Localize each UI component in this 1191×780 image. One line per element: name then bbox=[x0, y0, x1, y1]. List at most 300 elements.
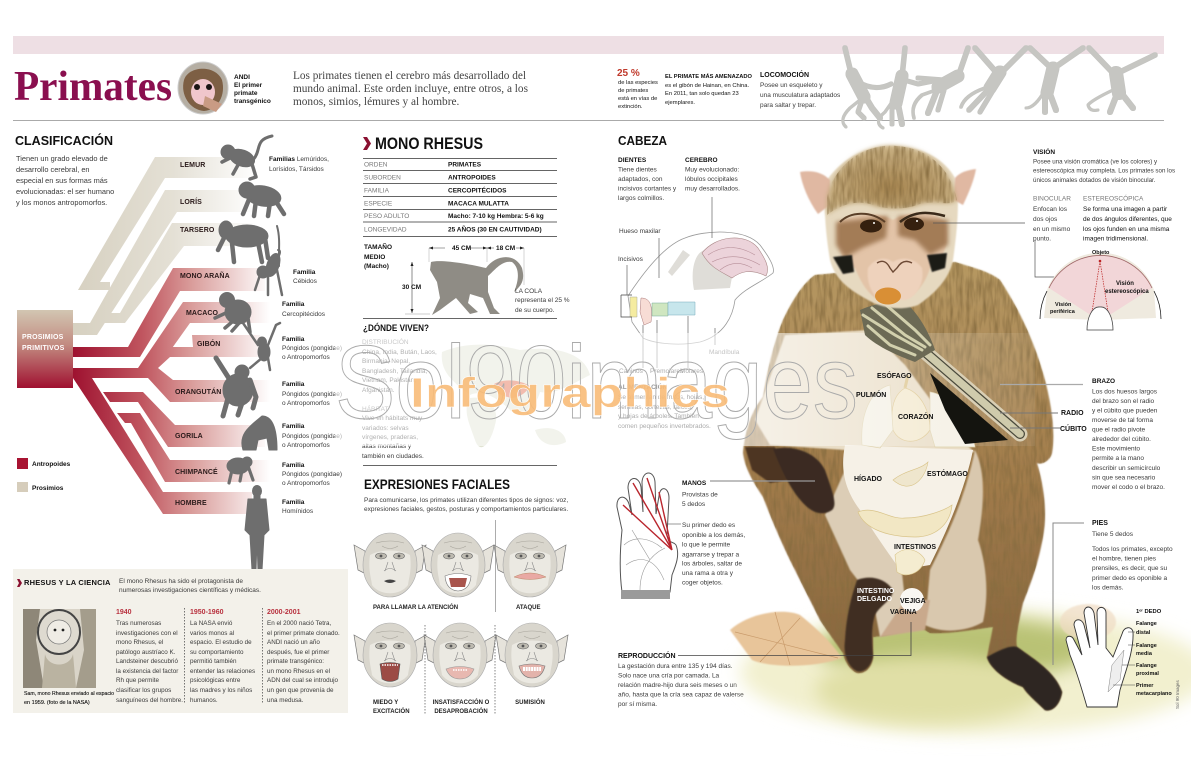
column 1950-1960: las madres y los niños bbox=[190, 687, 252, 694]
distribution and habitat text: Birmania, Nepal, bbox=[362, 358, 410, 365]
classification text: y los monos antropomorfos. bbox=[16, 198, 107, 207]
stereoscopic text: de dos ángulos diferentes, que bbox=[1083, 216, 1172, 223]
stat: 25 %: 25 % bbox=[617, 68, 640, 79]
organ labels: ESTÓMAGO bbox=[927, 469, 968, 478]
column 2000-2001: un gen que provenía de bbox=[267, 687, 334, 694]
feeding text: semillas, cortezas, raíces, bbox=[618, 404, 693, 411]
photo caption bbox=[234, 74, 271, 105]
legend: Antropoides bbox=[32, 461, 71, 468]
skull diagram bbox=[621, 197, 773, 368]
reproduction text: REPRODUCCIÓN bbox=[618, 651, 676, 660]
reproduction text: por sí misma. bbox=[618, 701, 657, 708]
column 2000-2001: ANDI nació un año bbox=[267, 639, 320, 646]
teeth text bbox=[618, 157, 677, 202]
column 2000-2001: ADN del cual se introdujo bbox=[267, 677, 339, 684]
teeth text: incisivos cortantes y bbox=[618, 186, 677, 192]
vision field diagram: estereoscópica bbox=[1105, 289, 1149, 295]
foot labels bbox=[1113, 609, 1172, 697]
hand bones bbox=[860, 301, 935, 362]
organ labels: INTESTINOS bbox=[894, 544, 936, 551]
expressions intro: expresiones faciales, gestos, posturas y comportamientos particulares. bbox=[364, 506, 568, 513]
monkey body bbox=[743, 262, 1062, 710]
skull labels: Mandíbula bbox=[709, 349, 740, 356]
family labels: o Antropomorfos bbox=[282, 442, 330, 449]
cheek patches bbox=[833, 253, 947, 274]
arm text: permite a la mano bbox=[1092, 455, 1144, 462]
left hand and wrist bbox=[745, 447, 834, 513]
hands text: coger objetos. bbox=[682, 580, 723, 586]
classification tree bbox=[17, 156, 342, 515]
cap texture bbox=[827, 146, 957, 215]
brain text: lóbulos occipitales bbox=[685, 176, 739, 183]
average size diagram bbox=[364, 242, 570, 315]
inner thighs bbox=[825, 450, 986, 637]
vision text: únicos animales dotados de visión binocular. bbox=[1033, 177, 1156, 184]
foot labels: distal bbox=[1136, 630, 1151, 636]
arm text bbox=[1092, 378, 1165, 491]
organ labels bbox=[854, 371, 968, 616]
column 1940: Landsteiner descubrió bbox=[116, 658, 178, 665]
heading: expresiones faciales: EXPRESIONES FACIALES bbox=[364, 476, 510, 492]
data table: ESPECIE bbox=[364, 200, 393, 208]
silhouette: tarsier group bbox=[218, 221, 279, 266]
feet text: prensiles, es decir, que su bbox=[1092, 565, 1168, 572]
column 2000-2001: primate transgénico: bbox=[267, 658, 324, 665]
reproduction text: Solo nace una cría por camada. La bbox=[618, 672, 720, 680]
stat: most endangered primate: EL PRIMATE MÁS AMENAZADO bbox=[665, 73, 752, 80]
family labels: Lorísidos, Társidos bbox=[269, 166, 325, 173]
eyes bbox=[840, 213, 945, 232]
organ labels: CORAZÓN bbox=[898, 412, 933, 421]
column 2000-2001: En el 2000 nació Tetra, bbox=[267, 620, 332, 627]
silhouette: lemur bbox=[221, 136, 272, 179]
column 1940: 1940 bbox=[116, 609, 132, 616]
watermark orange: Infographics bbox=[410, 369, 730, 416]
locomotion text bbox=[760, 70, 841, 109]
hands text bbox=[682, 480, 745, 586]
feet text bbox=[1092, 520, 1173, 592]
skull labels: Hueso maxilar bbox=[619, 228, 661, 235]
average size diagram: LA COLA bbox=[515, 288, 543, 295]
stat: most endangered primate: En 2011, tan solo quedan 23 bbox=[665, 91, 739, 97]
watermark outline: Sol90images bbox=[335, 325, 858, 441]
family labels: Homínidos bbox=[282, 508, 314, 515]
average size diagram: MEDIO bbox=[364, 254, 385, 261]
belly with organs bbox=[843, 375, 975, 612]
photo caption: primate bbox=[234, 90, 258, 97]
data table: PRIMATES bbox=[448, 162, 482, 168]
data table: ORDEN bbox=[364, 162, 388, 168]
classification text: Tienen un grado elevado de bbox=[16, 154, 108, 163]
teeth text: DIENTES bbox=[618, 157, 647, 164]
distribution and habitat text: Afganistán. bbox=[362, 387, 395, 394]
foot diagram bbox=[1060, 604, 1133, 707]
feeding text bbox=[618, 382, 711, 430]
organ labels: VAGINA bbox=[890, 609, 917, 616]
title: Primates bbox=[14, 64, 172, 110]
reproduction text: año, hasta que la cría sea capaz de valerse bbox=[618, 692, 744, 698]
family labels: Cercopitécidos bbox=[282, 311, 326, 318]
binocular text: en un mismo bbox=[1033, 226, 1071, 233]
stereoscopic text bbox=[1083, 194, 1172, 242]
panel intro: numerosas investigaciones científicas y médicas. bbox=[119, 587, 261, 594]
brain text: CEREBRO bbox=[685, 157, 718, 164]
family labels: Familia bbox=[282, 423, 305, 430]
top pink band bbox=[13, 36, 1164, 54]
hands text: oponible a los demás, bbox=[682, 532, 745, 539]
arm text: y el cúbito que pueden bbox=[1092, 408, 1158, 414]
face labels: PARA LLAMAR LA ATENCIÓN bbox=[373, 603, 458, 611]
expressions intro bbox=[364, 497, 568, 513]
branch labels bbox=[175, 162, 230, 507]
column 1950-1960: entender las relaciones bbox=[190, 668, 255, 675]
organ labels: PULMÓN bbox=[856, 390, 886, 399]
vision field diagram: Visión bbox=[1116, 281, 1134, 287]
teeth text: adaptados, con bbox=[618, 176, 663, 183]
column 1950-1960: La NASA envió bbox=[190, 620, 233, 627]
photo caption: transgénico bbox=[234, 98, 271, 105]
foot labels: metacarpiano bbox=[1136, 691, 1172, 697]
distribution and habitat text: Bangladesh, Tailandia, bbox=[362, 368, 427, 375]
feet text: Tiene 5 dedos bbox=[1092, 531, 1134, 538]
hands text: MANOS bbox=[682, 480, 707, 487]
panel heading: RHESUS Y LA CIENCIA bbox=[24, 578, 111, 587]
data table bbox=[363, 158, 557, 236]
radius and ulna labels: CÚBITO bbox=[1060, 424, 1087, 433]
heading: clasificación: CLASIFICACIÓN bbox=[15, 133, 113, 148]
distribution and habitat text: también en ciudades. bbox=[362, 453, 424, 460]
fruit bbox=[875, 288, 901, 304]
reproduction text: La gestación dura entre 135 y 194 días. bbox=[618, 663, 733, 670]
stat: 25 %: está en vías de bbox=[618, 96, 657, 102]
face labels: EXCITACIÓN bbox=[373, 707, 410, 715]
face: call attention 2 bbox=[422, 533, 494, 597]
gibbon locomotion sequence bbox=[843, 48, 1155, 128]
column 1950-1960: humanos. bbox=[190, 697, 218, 704]
face labels bbox=[373, 603, 545, 715]
panel intro: El mono Rhesus ha sido el protagonista de bbox=[119, 578, 243, 585]
pointer lines bbox=[678, 223, 1093, 665]
feet text: el hombre, tienen pies bbox=[1092, 556, 1157, 562]
hands text: Provistas de bbox=[682, 492, 718, 498]
distribution and habitat text: Vietnam, Pakistán, bbox=[362, 377, 416, 384]
teeth text: largos colmillos. bbox=[618, 195, 664, 202]
family labels bbox=[269, 156, 342, 515]
foot labels: media bbox=[1136, 651, 1153, 657]
hand diagram bbox=[617, 473, 681, 599]
face: dissatisfaction bbox=[424, 623, 496, 687]
classification text bbox=[16, 154, 114, 207]
binocular text: punto. bbox=[1033, 236, 1051, 242]
arm text: mover el codo o el brazo. bbox=[1092, 484, 1165, 491]
data table: Macho: 7-10 kg Hembra: 5-6 kg bbox=[448, 213, 544, 220]
organ labels: INTESTINO bbox=[857, 588, 895, 595]
family labels: o Antropomorfos bbox=[282, 354, 330, 361]
family labels: o Antropomorfos bbox=[282, 400, 330, 407]
world map bbox=[442, 345, 590, 447]
data table: LONGEVIDAD bbox=[364, 226, 407, 234]
locomotion text: una musculatura adaptados bbox=[760, 92, 841, 99]
feeding text: Se alimentan de frutos, hojas, bbox=[618, 394, 704, 401]
arm text: Los dos huesos largos bbox=[1092, 388, 1158, 396]
face skin bbox=[837, 213, 947, 298]
column 1950-1960: varios monos al bbox=[190, 630, 234, 637]
panel intro bbox=[119, 578, 261, 594]
silhouette: orangutan bbox=[216, 358, 256, 416]
arm text: BRAZO bbox=[1092, 378, 1115, 385]
face labels: INSATISFACCIÓN O bbox=[433, 698, 490, 706]
distribution and habitat text: vírgenes, praderas, bbox=[362, 434, 418, 441]
eye shading bbox=[836, 216, 948, 258]
illustration: rhesus monkey bbox=[335, 146, 1062, 710]
data table: FAMILIA bbox=[364, 188, 390, 194]
column 1950-1960: psicológicas entre bbox=[190, 677, 241, 684]
chest bbox=[755, 330, 975, 452]
arm text: Este movimiento bbox=[1092, 446, 1140, 452]
branch labels: CHIMPANCÉ bbox=[175, 467, 218, 476]
hands text: lo que le permite bbox=[682, 542, 730, 548]
locomotion text: para saltar y trepar. bbox=[760, 102, 816, 109]
column 2000-2001: después, fue el primer bbox=[267, 649, 329, 656]
head fur bbox=[825, 146, 958, 308]
photo: Andi baby monkey bbox=[178, 62, 228, 114]
organ labels: ESÓFAGO bbox=[877, 371, 912, 380]
data table: SUBORDEN bbox=[364, 174, 401, 182]
silhouette: gibbon bbox=[243, 323, 280, 370]
locomotion text: Posee un esqueleto y bbox=[760, 82, 823, 89]
organ labels: VEJIGA bbox=[900, 598, 926, 605]
distribution and habitat text: variados: selvas bbox=[362, 425, 409, 432]
foot labels: Falange bbox=[1136, 643, 1157, 649]
column 1950-1960: espacio. El estudio de bbox=[190, 639, 252, 646]
brain text bbox=[685, 157, 740, 192]
branch labels: TARSERO bbox=[180, 227, 215, 234]
organ labels: HÍGADO bbox=[854, 474, 883, 483]
illustration: leaf bbox=[730, 612, 842, 666]
hands text: una rama a otra y bbox=[682, 570, 734, 577]
photo caption bbox=[24, 691, 114, 706]
foot labels: Primer bbox=[1136, 683, 1154, 689]
face labels: DESAPROBACIÓN bbox=[434, 707, 488, 715]
data table: CERCOPITÉCIDOS bbox=[448, 186, 507, 194]
arm text: que el radio pivote bbox=[1092, 426, 1146, 434]
feeding text: comen pequeños invertebrados. bbox=[618, 423, 711, 430]
teeth text: Tiene dientes bbox=[618, 166, 658, 174]
silhouette: chimpanzee bbox=[227, 457, 253, 483]
face labels: ATAQUE bbox=[516, 605, 540, 611]
photo: space monkey Sam bbox=[23, 609, 96, 688]
branch labels: GIBÓN bbox=[197, 339, 220, 348]
feet text: primer dedo es oponible a bbox=[1092, 575, 1168, 582]
feet text: los demás. bbox=[1092, 584, 1124, 592]
muzzle and nose bbox=[868, 259, 923, 300]
average size diagram: representa el 25 % bbox=[515, 297, 570, 304]
arm text: alrededor del cúbito. bbox=[1092, 436, 1151, 443]
feeding text: y hojas de árboles. También bbox=[618, 413, 699, 420]
face labels: MIEDO Y bbox=[373, 700, 398, 706]
radius and ulna labels bbox=[1060, 410, 1087, 433]
stat: 25 %: de primates bbox=[618, 88, 648, 94]
face: fear bbox=[354, 623, 426, 687]
prosimian branches bbox=[73, 157, 258, 335]
binocular text: BINOCULAR bbox=[1033, 196, 1071, 202]
branch labels: MONO ARAÑA bbox=[180, 271, 230, 280]
silhouette: spider monkey bbox=[255, 250, 283, 295]
legend: Prosimios bbox=[32, 485, 64, 492]
face: attack bbox=[494, 533, 566, 597]
family labels: Familias Lemúridos, bbox=[269, 156, 329, 163]
stereoscopic text: ESTEREOSCÓPICA bbox=[1083, 194, 1144, 202]
family labels: Póngidos (pongidae) bbox=[282, 345, 342, 352]
distribution and habitat text: altas montañas y bbox=[362, 443, 412, 450]
stat: 25 % bbox=[617, 68, 658, 110]
stat: 25 %: de las especies bbox=[618, 80, 658, 86]
hands text: Su primer dedo es bbox=[682, 522, 736, 529]
reproduction text bbox=[618, 651, 744, 708]
brain text: Muy evolucionado: bbox=[685, 166, 739, 174]
veil band bbox=[335, 333, 1035, 446]
column 1950-1960: su comportamiento bbox=[190, 649, 244, 656]
root label bbox=[22, 334, 65, 352]
average size diagram: 18 CM bbox=[496, 245, 515, 252]
illustration: grass bbox=[740, 610, 1191, 734]
column 1940 bbox=[116, 609, 183, 704]
distribution and habitat text bbox=[362, 337, 437, 460]
classification text: desarrollo cerebral, en bbox=[16, 165, 90, 174]
foot labels: proximal bbox=[1136, 671, 1159, 677]
arm text: describir un semicírculo bbox=[1092, 465, 1161, 472]
credit: Sol 90 Images bbox=[1175, 679, 1180, 709]
expressions intro: Para comunicarse, los primates utilizan diferentes tipos de signos: voz, bbox=[364, 497, 568, 504]
face labels: SUMISIÓN bbox=[515, 698, 545, 706]
average size diagram: de su cuerpo. bbox=[515, 307, 555, 314]
photo caption: en 1959. (foto de la NASA) bbox=[24, 700, 90, 706]
intro text: monos, simios, lémures y al hombre. bbox=[293, 96, 459, 108]
vision field diagram: Visión bbox=[1055, 302, 1072, 308]
column 1940: investigaciones con el bbox=[116, 630, 178, 637]
vision text: Posee una visión cromática (ve los colores) y bbox=[1033, 158, 1158, 166]
foot labels: Falange bbox=[1136, 621, 1157, 627]
heading: dónde viven: ¿DÓNDE VIVEN? bbox=[363, 322, 429, 334]
family labels: Familia bbox=[282, 336, 305, 343]
photo caption: Sam, mono Rhesus enviado al espacio bbox=[24, 691, 114, 697]
vision text bbox=[1033, 147, 1175, 184]
intro text: mundo animal. Este orden incluye, entre otros, a los bbox=[293, 83, 528, 95]
arm text: moverse de tal forma bbox=[1092, 417, 1153, 424]
header rule bbox=[13, 120, 1164, 121]
data table: ANTROPOIDES bbox=[448, 174, 496, 182]
fur texture bbox=[743, 262, 1062, 710]
face: submission bbox=[496, 623, 568, 687]
radius and ulna labels: RADIO bbox=[1061, 410, 1084, 417]
classification text: especial en sus formas más bbox=[16, 176, 108, 185]
column 2000-2001: un mono Rhesus en el bbox=[267, 668, 330, 675]
vision text: VISIÓN bbox=[1033, 147, 1055, 156]
foot labels: Falange bbox=[1136, 663, 1157, 669]
column 1950-1960: permitió también bbox=[190, 658, 237, 665]
data table: PESO ADULTO bbox=[364, 213, 409, 220]
column 1950-1960: 1950-1960 bbox=[190, 609, 224, 616]
heading: cabeza: CABEZA bbox=[618, 133, 668, 148]
family labels: Póngidos (pongidae) bbox=[282, 433, 342, 440]
silhouette: macaque bbox=[215, 292, 251, 332]
stat: most endangered primate: es el gibón de Hainan, en China. bbox=[665, 83, 750, 89]
column 1950-1960 bbox=[190, 609, 255, 704]
hands text: los árboles, saltar de bbox=[682, 560, 742, 568]
face: call attention 1 bbox=[354, 533, 426, 597]
column 2000-2001: el primer primate clonado. bbox=[267, 630, 340, 637]
distribution and habitat text: DISTRIBUCIÓN bbox=[362, 337, 409, 346]
intro text: Los primates tienen el cerebro más desarrollado del bbox=[293, 70, 526, 82]
ears bbox=[800, 169, 976, 214]
skull labels: Incisivos bbox=[618, 256, 644, 263]
hands text: 5 dedos bbox=[682, 501, 706, 508]
family labels: Familia bbox=[282, 462, 305, 469]
data table: 25 AÑOS (30 EN CAUTIVIDAD) bbox=[448, 224, 542, 234]
stat: most endangered primate: ejemplares. bbox=[665, 100, 695, 106]
panel: Rhesus y la ciencia bbox=[13, 569, 348, 713]
family labels: Póngidos (pongidae) bbox=[282, 391, 342, 398]
stat: most endangered primate bbox=[665, 73, 752, 106]
skull labels: Premolares bbox=[650, 368, 684, 375]
feet text: PIES bbox=[1092, 520, 1108, 527]
arm text: sin que sea necesario bbox=[1092, 474, 1156, 482]
anthropoid branches bbox=[73, 268, 275, 514]
brain text: muy desarrollados. bbox=[685, 186, 740, 192]
column 2000-2001: una medusa. bbox=[267, 697, 304, 704]
feet text: Todos los primates, excepto bbox=[1092, 546, 1173, 553]
stereoscopic text: imagen tridimensional. bbox=[1083, 236, 1148, 242]
distribution and habitat text: HÁBITAT bbox=[362, 404, 389, 413]
distribution and habitat text: Vive en hábitats muy bbox=[362, 415, 423, 422]
column 1940: Rh que permite bbox=[116, 677, 160, 684]
column 1940: patólogo austríaco K. bbox=[116, 649, 176, 656]
silhouette: human bbox=[245, 486, 269, 570]
average size diagram: 45 CM bbox=[452, 245, 471, 252]
reproduction text: relación madre-hijo dura seis meses o un bbox=[618, 682, 737, 689]
branch labels: MACACO bbox=[186, 310, 219, 317]
branch labels: HOMBRE bbox=[175, 500, 207, 507]
root box bbox=[17, 310, 73, 388]
column 1940: sanguíneos del hombre. bbox=[116, 697, 183, 704]
data table: MACACA MULATTA bbox=[448, 200, 509, 208]
branch labels: LEMUR bbox=[180, 162, 205, 169]
column 1940: clasificar los grupos bbox=[116, 687, 171, 694]
branch labels: GORILA bbox=[175, 433, 203, 440]
column 2000-2001: 2000-2001 bbox=[267, 609, 301, 616]
binocular text bbox=[1033, 196, 1071, 242]
arm text: del brazo son el radio bbox=[1092, 398, 1155, 405]
stereoscopic text: Se forma una imagen a partir bbox=[1083, 206, 1168, 213]
average size diagram: 30 CM bbox=[402, 284, 421, 291]
root label: PROSIMIOS bbox=[22, 334, 64, 341]
binocular text: dos ojos bbox=[1033, 216, 1058, 223]
branch labels: ORANGUTÁN bbox=[175, 387, 221, 396]
binocular text: Enfocan los bbox=[1033, 206, 1068, 213]
skull labels bbox=[618, 228, 740, 375]
foot labels: 1ᵉʳ DEDO bbox=[1136, 609, 1162, 615]
vision field diagram: periférica bbox=[1050, 309, 1076, 315]
legend bbox=[17, 458, 71, 492]
family labels: Familia bbox=[282, 381, 305, 388]
family labels: Familia bbox=[293, 269, 316, 276]
silhouette: gorilla bbox=[242, 416, 277, 450]
hands text: agarrarse y trepar a bbox=[682, 552, 739, 558]
locomotion text: LOCOMOCIÓN bbox=[760, 70, 809, 79]
average size diagram: (Macho) bbox=[364, 263, 389, 270]
family labels: Cébidos bbox=[293, 278, 318, 285]
column 1940: mono Rhesus, el bbox=[116, 639, 163, 646]
